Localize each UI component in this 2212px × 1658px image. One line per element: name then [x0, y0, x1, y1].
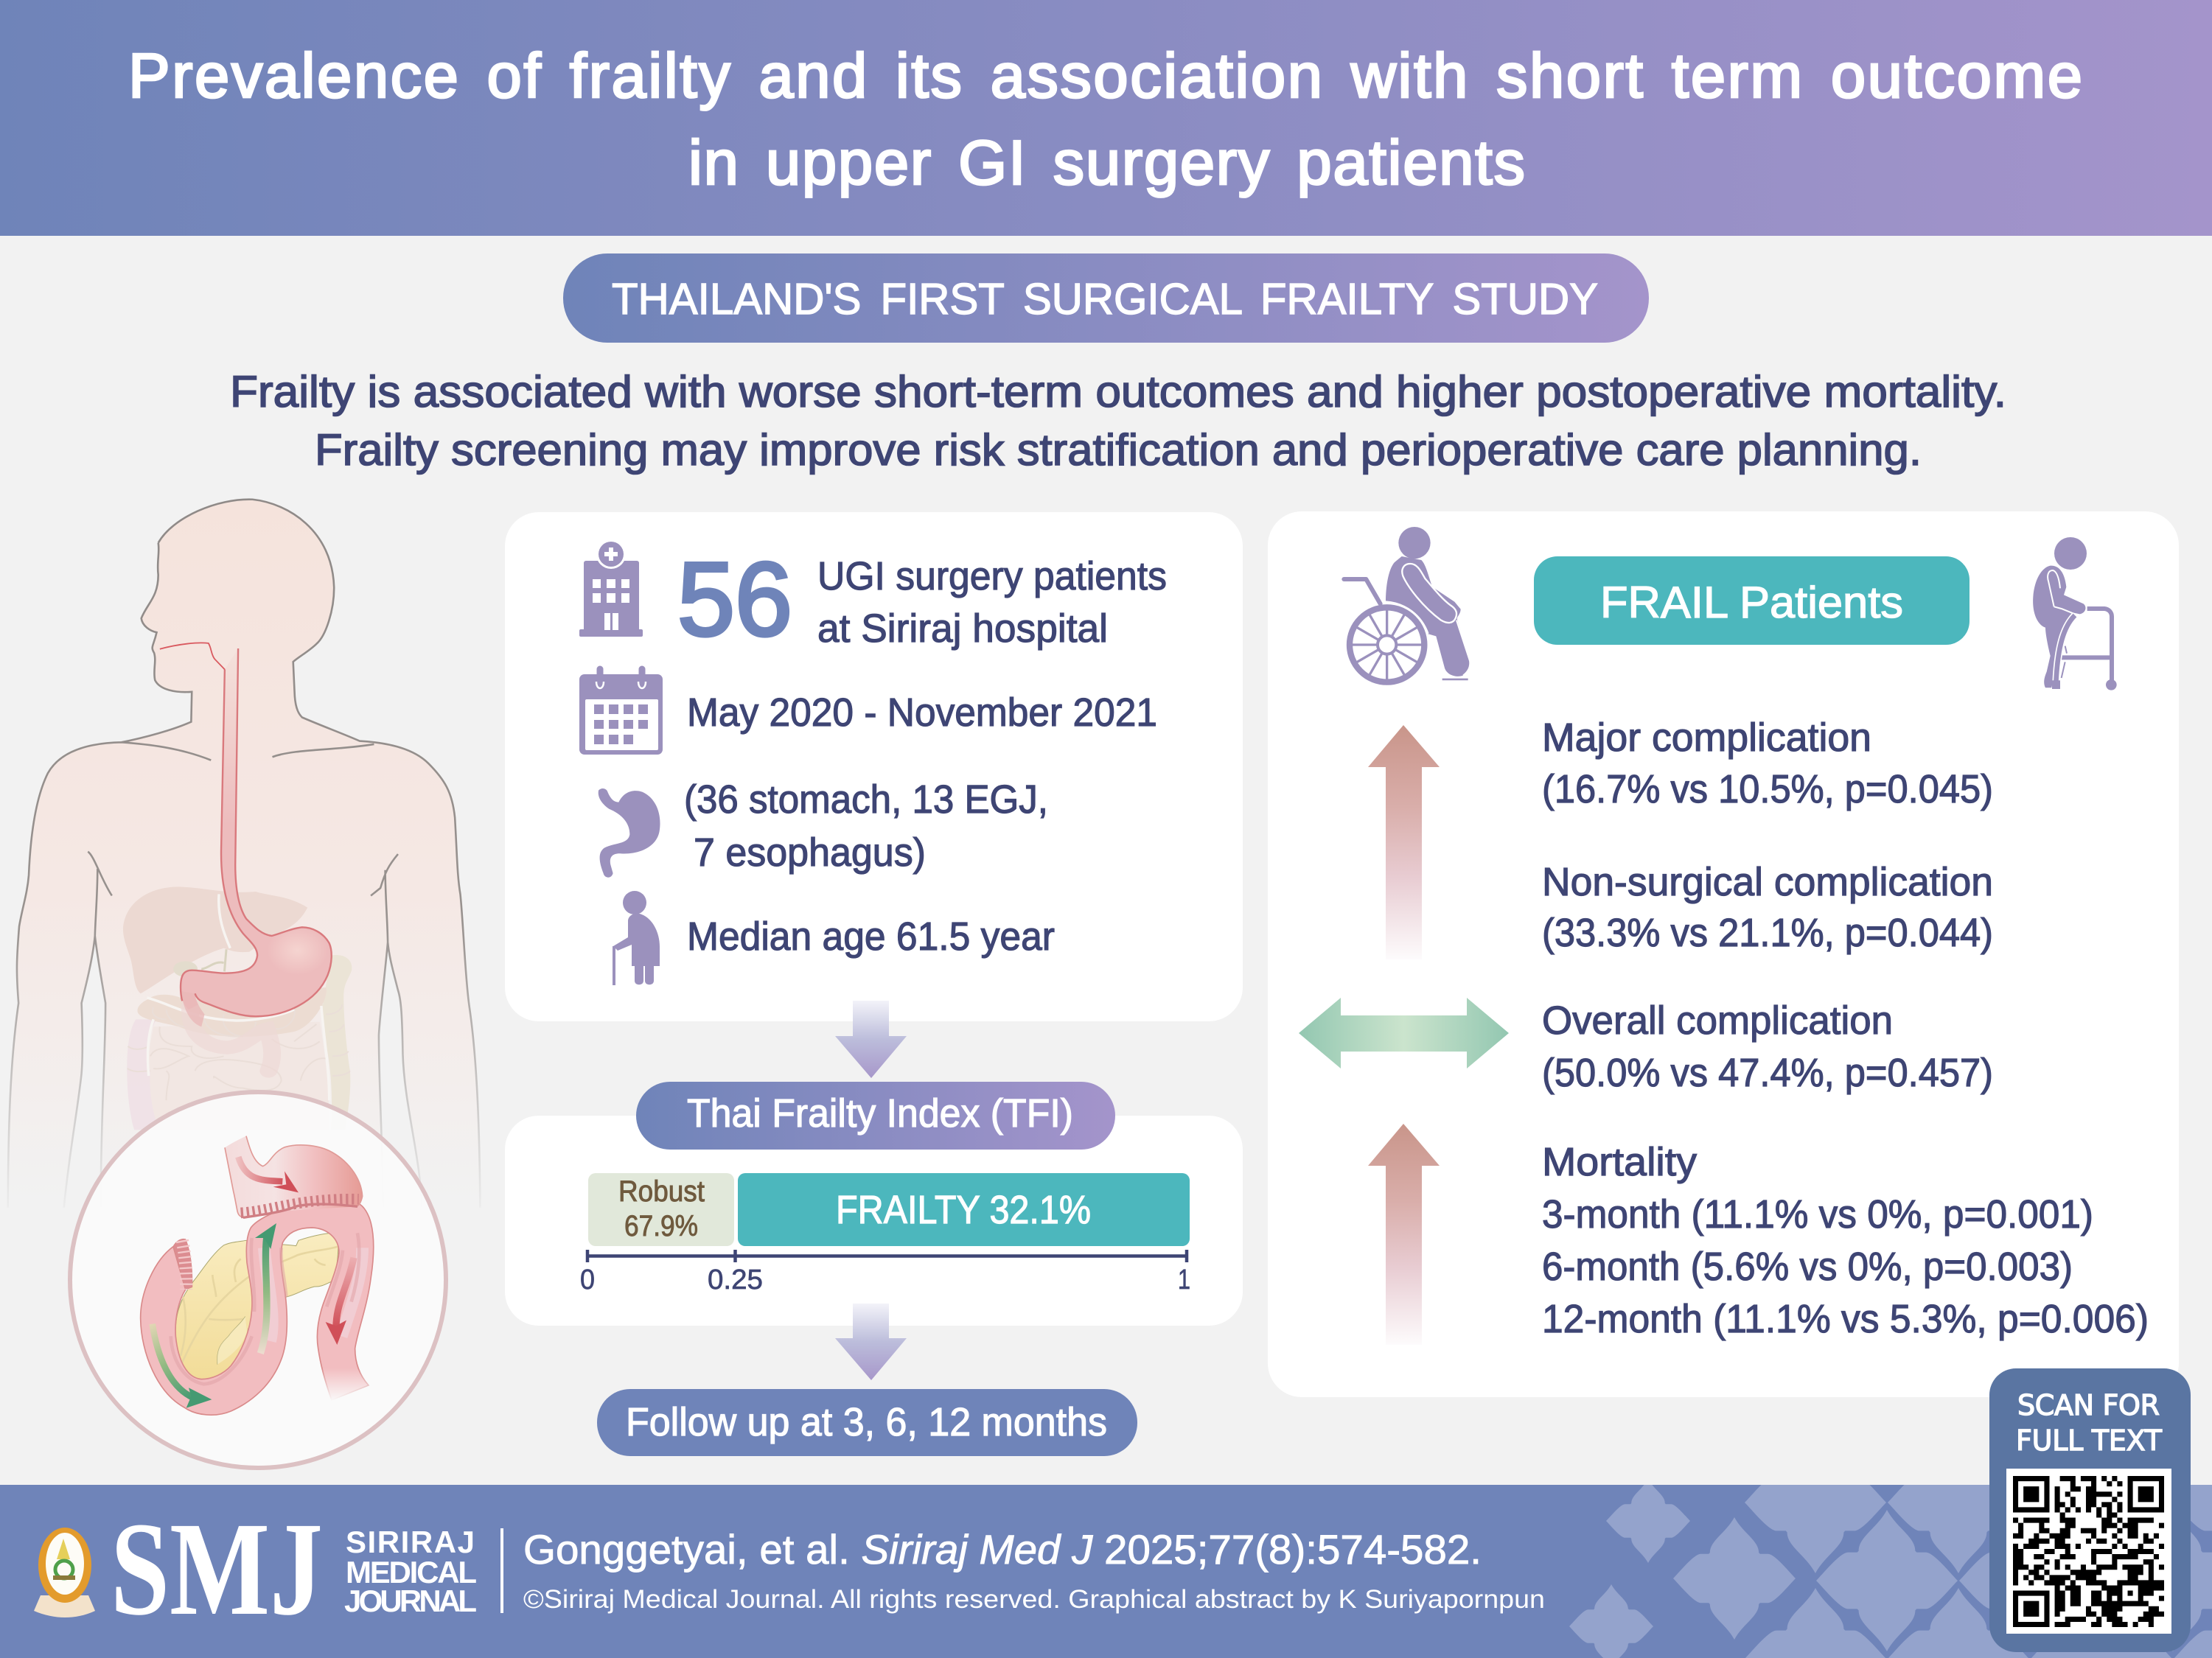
pill: follow up: Follow up at 3, 6, 12 months — [626, 1400, 1107, 1444]
text: tumour sites — [684, 777, 1048, 875]
text: major complication: (16.7% vs 10.5%, p=0.045) — [1542, 767, 1993, 811]
arrow: increased mortality — [1368, 1124, 1440, 1345]
QR caption — [2016, 1389, 2163, 1457]
arrow: increased complications — [1368, 725, 1440, 959]
stacked bar: robust — [588, 1173, 734, 1246]
conclusion text: Frailty screening may improve risk stratification and perioperative care planning. — [315, 425, 1922, 475]
icon: stomach — [599, 788, 660, 878]
scale axis — [580, 1250, 1190, 1295]
panel: frail patient outcomes — [1268, 511, 2179, 1397]
title — [128, 41, 2082, 198]
text: patients — [817, 554, 1167, 651]
panel: frailty index — [505, 1116, 1243, 1326]
arrow: no difference — [1299, 998, 1509, 1068]
header banner — [0, 0, 2212, 236]
QR caption: FULL TEXT — [2016, 1424, 2163, 1457]
scale axis: 0.25 — [708, 1265, 763, 1295]
number: 56 patients: 56 — [677, 541, 792, 658]
text: major complication: Major complication — [1542, 716, 1871, 760]
stapled stump — [173, 1239, 192, 1290]
citation: Gonggetyai, et al. Siriraj Med J 2025;77(8):574-582. — [523, 1526, 1482, 1573]
icon: person with walker — [2033, 537, 2117, 690]
stacked bar: frailty — [738, 1173, 1190, 1246]
logo: journal name — [344, 1525, 477, 1618]
QR panel — [1989, 1368, 2191, 1652]
badge: FRAIL patients — [1534, 556, 1969, 645]
copyright: ©Siriraj Medical Journal. All rights reserved. Graphical abstract by K Suriyapornpun — [523, 1585, 1545, 1614]
text: mortality: Mortality — [1542, 1140, 1697, 1184]
pill: follow up — [597, 1389, 1137, 1456]
pill: Thai Frailty Index — [636, 1082, 1115, 1150]
inset circle: surgical anatomy — [70, 1092, 446, 1468]
QR code — [2006, 1469, 2171, 1634]
text: non-surgical complication: Non-surgical complication — [1542, 860, 1993, 904]
icon: wheelchair — [1344, 527, 1470, 682]
title: in upper GI surgery patients — [688, 128, 1525, 198]
gastrojejunal reconstruction — [141, 1136, 376, 1415]
text: tumour sites: (36 stomach, 13 EGJ, — [684, 777, 1048, 822]
pancreas — [175, 1233, 338, 1379]
stacked bar: robust: 67.9% — [624, 1210, 698, 1242]
body silhouette — [8, 500, 480, 1208]
badge: FRAIL patients: FRAIL Patients — [1600, 578, 1903, 627]
panel: study population — [505, 512, 1243, 1021]
text: non-surgical complication — [1542, 860, 1993, 955]
text: tumour sites: 7 esophagus) — [694, 830, 926, 875]
arrow: to frailty index — [835, 1001, 907, 1078]
logo: journal name: MEDICAL — [346, 1555, 477, 1589]
esophagus and stomach — [181, 648, 332, 1016]
text: overall complication: Overall complication — [1542, 998, 1893, 1043]
text: mortality — [1542, 1140, 2149, 1341]
scale axis: 1 — [1178, 1265, 1190, 1295]
logo: emblem — [34, 1528, 95, 1617]
text: major complication — [1542, 716, 1993, 811]
text: study period: May 2020 - November 2021 — [687, 690, 1157, 735]
conclusion text: Frailty is associated with worse short-term outcomes and higher postoperative mortality. — [230, 367, 2006, 416]
text: median age: Median age 61.5 year — [687, 914, 1055, 959]
scale axis: 0 — [580, 1265, 595, 1295]
logo: journal name: SIRIRAJ — [346, 1525, 475, 1559]
stacked bar: frailty: FRAILTY 32.1% — [836, 1188, 1091, 1232]
internal organs — [123, 648, 352, 1130]
study banner pill: THAILAND'S FIRST SURGICAL FRAILTY STUDY — [612, 275, 1598, 323]
footer band — [0, 1485, 2212, 1658]
arrow: to follow up — [835, 1304, 907, 1380]
jejunal limb — [141, 1203, 374, 1415]
logo: journal name: JOURNAL — [344, 1584, 477, 1618]
study banner pill — [563, 253, 1649, 343]
conclusion text — [230, 367, 2006, 475]
icon: elderly person with cane — [613, 891, 660, 985]
text: mortality: 6-month (5.6% vs 0%, p=0.003) — [1542, 1245, 2073, 1289]
flow arrows — [153, 1324, 194, 1398]
text: patients: UGI surgery patients — [817, 554, 1167, 598]
text: non-surgical complication: (33.3% vs 21.1%, p=0.044) — [1542, 911, 1993, 955]
icon: hospital — [579, 539, 643, 637]
text: patients: at Siriraj hospital — [817, 606, 1108, 651]
text: overall complication — [1542, 998, 1993, 1095]
title: Prevalence of frailty and its association with short term outcome — [128, 41, 2082, 111]
gastric pouch — [225, 1136, 363, 1217]
text: mortality: 3-month (11.1% vs 0%, p=0.001) — [1542, 1192, 2093, 1236]
stacked bar: robust: Robust — [618, 1175, 705, 1208]
logo: SMJ: SMJ — [111, 1495, 323, 1643]
icon: calendar — [579, 669, 663, 755]
QR caption: SCAN FOR — [2017, 1389, 2160, 1421]
anatomy illustration: human body — [8, 500, 480, 1208]
pill: Thai Frailty Index: Thai Frailty Index (TFI) — [687, 1091, 1073, 1136]
mouth line — [160, 643, 225, 669]
text: mortality: 12-month (11.1% vs 5.3%, p=0.006) — [1542, 1297, 2149, 1341]
text: overall complication: (50.0% vs 47.4%, p=0.457) — [1542, 1051, 1993, 1095]
